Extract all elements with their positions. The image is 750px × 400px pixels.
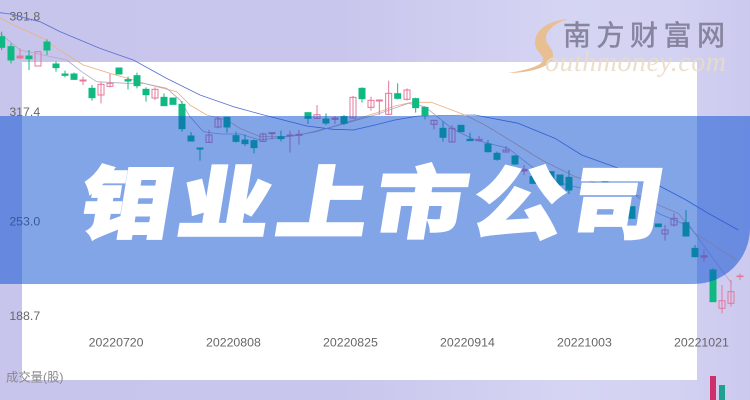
- axis labels: 20220720: [89, 335, 144, 349]
- axis labels: 253.0: [9, 214, 40, 228]
- translucent blue title band: [0, 116, 750, 284]
- white chart panel: [22, 62, 697, 380]
- title: 钼业上市公司: [74, 141, 680, 255]
- red candles: [17, 48, 743, 313]
- axis labels: 20221003: [557, 335, 612, 349]
- axis labels: 317.4: [9, 105, 40, 119]
- green candles: [0, 32, 716, 302]
- volume bars: [710, 376, 725, 400]
- axis labels: 188.7: [9, 309, 40, 323]
- axis labels: 20220825: [323, 335, 378, 349]
- axis labels: 20221021: [674, 335, 729, 349]
- axis labels: 成交量(股): [6, 369, 64, 384]
- axis labels: 20220808: [206, 335, 261, 349]
- southmoney logo: [508, 19, 731, 78]
- moving average lines: [0, 13, 738, 283]
- logo chinese name: 南方财富网: [563, 20, 731, 51]
- logo swoosh: [508, 19, 569, 73]
- logo english name: outhmoney.com: [545, 47, 726, 78]
- axis labels: 20220914: [440, 335, 495, 349]
- axis labels: 381.8: [9, 10, 40, 24]
